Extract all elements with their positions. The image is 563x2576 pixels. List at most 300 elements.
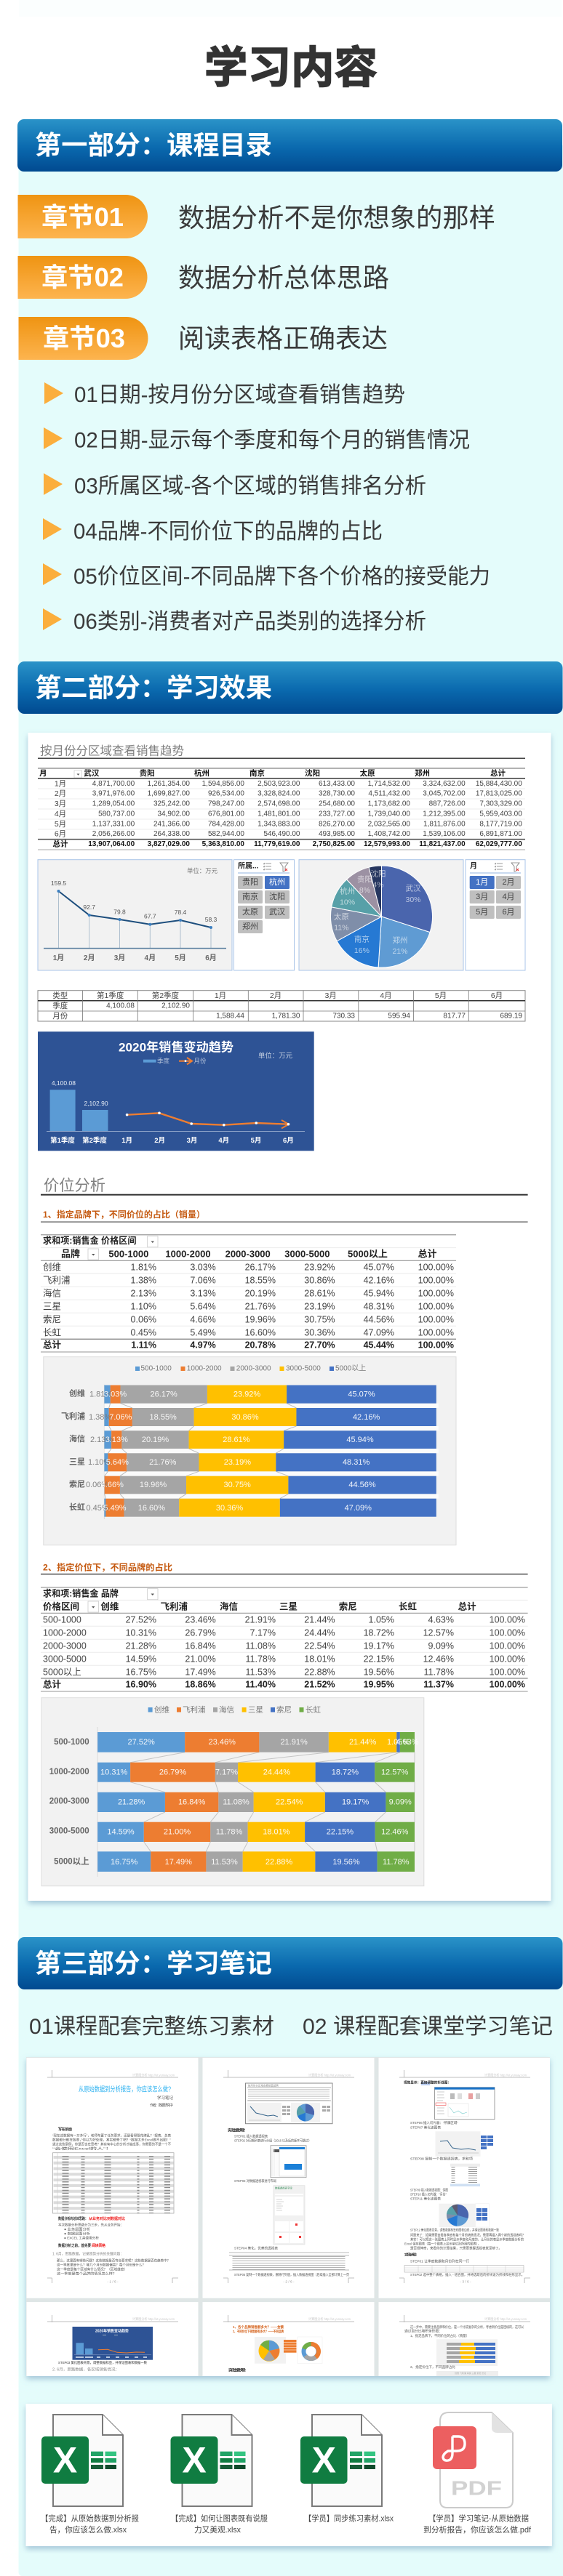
table: quarter and month totals bbox=[38, 991, 525, 1021]
value labels: 7.17% bbox=[215, 1768, 238, 1777]
pivot table: brand by price band: 2.13% bbox=[131, 1288, 156, 1298]
heading: price analysis: 价位分析 bbox=[44, 1178, 105, 1194]
line chart: monthly trend: 92.7 bbox=[83, 903, 95, 911]
value labels: 11.53% bbox=[211, 1858, 238, 1867]
document page 2: 计算图分析 http://ot.yunsay.com bbox=[308, 2073, 351, 2077]
document page 1: 阅读表格 bbox=[92, 2243, 105, 2248]
legend bbox=[148, 1704, 321, 1714]
heading: part one bbox=[17, 119, 562, 172]
value labels: 11.78% bbox=[216, 1827, 242, 1836]
table: monthly regional sales: 3,045,702.00 bbox=[423, 790, 466, 798]
table: monthly regional sales: 8,177,719.00 bbox=[479, 820, 522, 828]
pivot table: price band by brand: 12.57% bbox=[423, 1627, 454, 1638]
table: monthly regional sales: 241,366.00 bbox=[153, 820, 190, 828]
legend: 2000-3000 bbox=[236, 1365, 271, 1372]
pivot table: brand by price band: 0.06% bbox=[131, 1314, 156, 1324]
document page 3: 计算图分析 http://ot.yunsay.com bbox=[484, 2073, 527, 2077]
legend: 长虹 bbox=[306, 1705, 321, 1714]
table: quarter and month totals: 2,102.90 bbox=[161, 1002, 190, 1010]
pivot table: price band by brand: 19.56% bbox=[364, 1667, 394, 1677]
slicer: month: 1月 bbox=[476, 878, 488, 887]
table: monthly regional sales: 1,289,054.00 bbox=[92, 800, 135, 808]
table: monthly regional sales: 17,813,025.00 bbox=[476, 790, 522, 798]
document page 1: 这一季度是每个区域有什么情况？（区域维度） bbox=[57, 2266, 127, 2272]
pivot table: brand by price band: 100.00% bbox=[418, 1340, 454, 1350]
table: monthly regional sales: 798,247.00 bbox=[208, 800, 244, 808]
combo chart: 2020 sales trend: 2,102.90 bbox=[84, 1100, 108, 1107]
combo chart: 2020 sales trend: 2020年销售变动趋势 bbox=[119, 1039, 233, 1054]
table: monthly regional sales: 1,811,876.00 bbox=[423, 820, 466, 828]
document page 2: STEP02 对日期列表进行分组（2016 以及后的版本可跳过） bbox=[234, 2138, 311, 2143]
document page 2: STEP03 对数据透视表进行布局 bbox=[234, 2178, 276, 2183]
label: file 1 bbox=[41, 2513, 139, 2535]
line chart: monthly trend: 159.5 bbox=[51, 880, 66, 887]
pivot table: brand by price band: 3.03% bbox=[190, 1262, 216, 1272]
pivot table: price band by brand: 100.00% bbox=[490, 1627, 525, 1638]
pivot table: price band by brand: 11.53% bbox=[246, 1667, 276, 1677]
pivot table: price band by brand: 求和项:销售金 品牌 bbox=[43, 1587, 119, 1598]
brand labels: 长虹 bbox=[69, 1502, 85, 1512]
pivot table: brand by price band: 2000-3000 bbox=[225, 1249, 271, 1259]
pivot table: price band by brand: 22.15% bbox=[364, 1654, 394, 1664]
document page 1: 数据都分散在各表，”你以为好处理，其实都晕了吧？“数据太多Excel做不出图！” bbox=[52, 2137, 171, 2143]
pivot table: brand by price band: 45.44% bbox=[364, 1340, 394, 1350]
table: monthly regional sales: 1,699,827.00 bbox=[148, 790, 190, 798]
table: monthly regional sales: 4月 bbox=[55, 810, 66, 818]
pivot table: brand by price band: 5.64% bbox=[190, 1301, 216, 1311]
table: quarter and month totals: 1月 bbox=[215, 991, 226, 1000]
pivot table: price band by brand: 9.09% bbox=[428, 1641, 454, 1651]
pivot table: price band by brand: 21.28% bbox=[126, 1641, 156, 1651]
pivot table: price band by brand: 海信 bbox=[220, 1601, 238, 1611]
table: monthly regional sales: 926,534.00 bbox=[208, 790, 244, 798]
value labels: 18.01% bbox=[263, 1827, 290, 1836]
table: monthly regional sales: 34,902.00 bbox=[157, 810, 190, 818]
pivot table: price band by brand: 22.54% bbox=[304, 1641, 335, 1651]
value labels: 16.75% bbox=[111, 1858, 138, 1867]
line chart: monthly trend: 4月 bbox=[145, 954, 156, 962]
pivot table: price band by brand: 100.00% bbox=[490, 1667, 525, 1677]
value labels: 9.09% bbox=[389, 1798, 412, 1807]
legend bbox=[135, 1364, 366, 1372]
value labels: 1.38% bbox=[89, 1413, 111, 1422]
bullet list: 04品牌-不同价位下的品牌的占比 bbox=[73, 520, 383, 544]
pivot table: price band by brand: 总计 bbox=[458, 1601, 476, 1611]
line chart: monthly trend bbox=[38, 860, 232, 970]
table: monthly regional sales: 1,594,856.00 bbox=[202, 780, 244, 788]
slicer: region: 杭州 bbox=[269, 877, 285, 887]
value labels: 3.03% bbox=[104, 1390, 127, 1398]
label: file 2: 力又美观.xlsx bbox=[194, 2525, 241, 2535]
mini dashboard bbox=[246, 2083, 332, 2124]
table: quarter and month totals: 3月 bbox=[325, 991, 337, 1000]
document page 3: STEP06 插入切片器："所属区域" bbox=[410, 2120, 458, 2125]
pie chart: region share: 10% bbox=[340, 898, 355, 907]
value labels: 23.46% bbox=[209, 1738, 236, 1747]
table: monthly regional sales: 11,821,437.00 bbox=[419, 840, 466, 848]
panel: document thumbnails backing bbox=[26, 2057, 550, 2376]
document page 3: STEP09 插入数据透视图：饼图 bbox=[410, 2188, 448, 2192]
label: file 1: 告，你应该怎么做.xlsx bbox=[49, 2524, 127, 2535]
chapter 01: 数据分析不是你想象的那样 bbox=[178, 203, 495, 233]
value labels: 22.54% bbox=[276, 1798, 303, 1807]
value labels: 14.59% bbox=[107, 1827, 135, 1836]
table: quarter and month totals: 4月 bbox=[380, 991, 392, 1000]
table: quarter and month totals: 第1季度 bbox=[97, 991, 124, 1000]
mini stacked bars bbox=[436, 2339, 498, 2366]
value labels: 5.64% bbox=[106, 1458, 129, 1467]
combo chart: 2020 sales trend: 月份 bbox=[193, 1058, 207, 1065]
pivot table: brand by price band: 1.11% bbox=[131, 1340, 156, 1350]
pivot table: price band by brand: 17.49% bbox=[185, 1667, 216, 1677]
table: monthly regional sales: 1,714,532.00 bbox=[368, 780, 410, 788]
table: monthly regional sales: 887,726.00 bbox=[429, 800, 466, 808]
table: quarter and month totals: 5月 bbox=[435, 991, 447, 1000]
slicer: month bbox=[466, 860, 525, 970]
pivot table: price band by brand: 7.17% bbox=[250, 1627, 276, 1638]
mini pivot bbox=[229, 2253, 349, 2271]
combo chart: 2020 sales trend: 5月 bbox=[251, 1137, 261, 1145]
bars bbox=[97, 1732, 415, 1872]
value labels: 5.49% bbox=[103, 1504, 127, 1513]
label: pdf file: 【学员】学习笔记-从原始数据 bbox=[428, 2513, 529, 2524]
value labels: 28.61% bbox=[223, 1436, 250, 1444]
document page 1: 这一季度里是什么？哪几个月份数据偏高？每个月份是什么？ bbox=[57, 2262, 145, 2268]
pivot table: brand by price band: 27.70% bbox=[304, 1340, 335, 1350]
label: pdf file bbox=[423, 2513, 532, 2535]
pivot table: brand by price band: 1000-2000 bbox=[165, 1249, 211, 1259]
bars bbox=[104, 1385, 436, 1517]
slicer: region: 贵阳 bbox=[242, 877, 258, 887]
pivot table: price band by brand: 2000-3000 bbox=[43, 1641, 87, 1651]
document page 3: STEP02 选中整个表格，插入 - 组合图，并将选取后的折线设为折线和柱形显示。 bbox=[410, 2272, 524, 2277]
document page 1: “会使用Excel的人”！ bbox=[52, 2146, 112, 2152]
document page 1: ● 数据层面分析 bbox=[64, 2231, 90, 2236]
table: quarter and month totals: 4,100.08 bbox=[106, 1002, 135, 1010]
mini field pane: 数据透视表字段 bbox=[275, 2186, 292, 2189]
combo chart: 2020 sales trend: 6月 bbox=[283, 1137, 294, 1145]
table: monthly regional sales: 杭州 bbox=[194, 768, 209, 778]
slicer: month: 月 bbox=[470, 862, 477, 871]
panel: chapter list bbox=[17, 195, 495, 360]
pivot table: price band by brand: 19.95% bbox=[364, 1680, 394, 1690]
sheet title: 按月份分区域查看销售趋势 bbox=[40, 744, 184, 757]
pivot table: price band by brand: 11.78% bbox=[246, 1654, 276, 1664]
value labels: 18.55% bbox=[150, 1413, 177, 1422]
heading: part two bbox=[17, 661, 563, 714]
table: monthly regional sales: 11,779,619.00 bbox=[254, 840, 300, 848]
pivot table: price band by brand: 14.59% bbox=[126, 1654, 156, 1664]
table: monthly regional sales: 3,328,824.00 bbox=[257, 790, 300, 798]
top pale strip bbox=[19, 0, 562, 17]
pivot table: brand by price band: 4.97% bbox=[190, 1340, 216, 1350]
pivot table: brand by price band: 20.19% bbox=[245, 1288, 276, 1298]
value labels: 30.36% bbox=[216, 1504, 243, 1513]
pivot table: brand by price band: 总计 bbox=[418, 1249, 437, 1259]
mini blue chart bbox=[73, 2327, 153, 2360]
document page 1: 数据分析之前，首先要 bbox=[58, 2243, 91, 2248]
pivot table: brand by price band: 索尼 bbox=[43, 1314, 61, 1324]
document page 1: 1. 6月，思路数据，记录趋势分析的关键问题： bbox=[52, 2251, 124, 2257]
pivot table: price band by brand bbox=[41, 1587, 528, 1691]
pivot table: price band by brand: 16.84% bbox=[185, 1641, 216, 1651]
document page 2 bbox=[202, 2058, 374, 2298]
table: monthly regional sales: 4,511,432.00 bbox=[368, 790, 410, 798]
line chart: monthly trend: 79.8 bbox=[113, 909, 126, 916]
mini pie bbox=[439, 2204, 489, 2227]
value labels: 42.16% bbox=[353, 1413, 380, 1422]
title: 学习内容 bbox=[204, 44, 378, 92]
table: monthly regional sales: 3,324,632.00 bbox=[423, 780, 466, 788]
table: monthly regional sales: 1,173,682.00 bbox=[368, 800, 410, 808]
table: monthly regional sales: 3,827,029.00 bbox=[148, 840, 190, 848]
stacked bar chart: brands by price band bbox=[41, 1698, 424, 1886]
table: monthly regional sales: 1,481,801.00 bbox=[257, 810, 300, 818]
band labels: 2000-3000 bbox=[49, 1798, 89, 1806]
pivot table: brand by price band: 三星 bbox=[43, 1301, 61, 1311]
icon: excel file 1 bbox=[41, 2415, 123, 2506]
document page 3: STEP07 美化该图表 bbox=[410, 2125, 441, 2130]
document page 3: STEP11 美化该图表 bbox=[410, 2197, 441, 2201]
pivot table: price band by brand: 100.00% bbox=[490, 1614, 525, 1625]
pie chart: region share: 太原 bbox=[334, 912, 349, 922]
value labels: 26.17% bbox=[151, 1390, 177, 1398]
table: monthly regional sales: 6月 bbox=[55, 830, 66, 839]
pivot table: brand by price band: 1.38% bbox=[131, 1275, 156, 1285]
value labels: 21.00% bbox=[164, 1827, 191, 1836]
mini chart dialog bbox=[435, 2088, 495, 2120]
table: quarter and month totals: 1,588.44 bbox=[216, 1012, 244, 1021]
pivot table: price band by brand: 21.00% bbox=[185, 1654, 216, 1664]
bullet list: 05价位区间-不同品牌下各个价格的接受能力 bbox=[73, 565, 490, 589]
brand labels: 飞利浦 bbox=[61, 1411, 85, 1421]
table: monthly regional sales: 1,137,331.00 bbox=[92, 820, 135, 828]
legend: 三星 bbox=[248, 1705, 263, 1714]
combo chart: 2020 sales trend: 单位：万元 bbox=[258, 1051, 292, 1060]
table: monthly regional sales: 2月 bbox=[55, 789, 66, 798]
value labels: 16.60% bbox=[138, 1504, 165, 1513]
table: monthly regional sales: 328,730.00 bbox=[319, 790, 355, 798]
value labels: 7.06% bbox=[109, 1413, 132, 1422]
value labels: 44.56% bbox=[348, 1481, 376, 1489]
pivot table: brand by price band: 总计 bbox=[43, 1339, 62, 1350]
pivot table: price band by brand: 索尼 bbox=[339, 1601, 357, 1611]
value labels: 4.63% bbox=[396, 1738, 419, 1747]
pivot table: brand by price band: 26.17% bbox=[245, 1262, 276, 1272]
document page 1: 那么，这里面有哪些问题？这些数据是否符合要求呢？这些数据是否在趋势中？ bbox=[57, 2258, 170, 2263]
table: monthly regional sales: 1,343,883.00 bbox=[257, 820, 300, 828]
heading: part three: 第三部分：学习笔记 bbox=[35, 1948, 272, 1979]
pivot table: price band by brand: 总计 bbox=[43, 1679, 62, 1690]
slicer: month: 6月 bbox=[502, 908, 515, 917]
pivot table: brand by price band: 20.78% bbox=[245, 1340, 276, 1350]
combo chart: 2020 sales trend: 第2季度 bbox=[82, 1136, 107, 1145]
document page 1: 作者：数据研究中 bbox=[150, 2103, 173, 2108]
document page 1: 这一季度是每个品牌的情况怎么样？ bbox=[57, 2271, 116, 2277]
table: monthly regional sales: 62,029,777.00 bbox=[476, 840, 522, 848]
document page 1 bbox=[26, 2058, 198, 2298]
bullet list: 01日期-按月份分区域查看销售趋势 bbox=[74, 383, 405, 407]
pivot table: price band by brand: 21.91% bbox=[245, 1614, 276, 1625]
value labels: 45.94% bbox=[346, 1436, 374, 1444]
document page 2: STEP05 复制一个数据透视表，删除行列值，插入数据透视图（后续插入全部计算上一页 bbox=[234, 2272, 349, 2277]
slicer: month: 3月 bbox=[476, 893, 488, 901]
value labels: 1.10% bbox=[88, 1458, 111, 1467]
document page 1: 写在前面 bbox=[58, 2127, 72, 2132]
chapter 02 bbox=[17, 256, 389, 299]
document page 5: 实现主要步骤： bbox=[228, 2367, 248, 2372]
value labels: 10.31% bbox=[100, 1768, 128, 1777]
pie chart: region share: 南京 bbox=[354, 935, 370, 944]
value labels: 30.75% bbox=[224, 1481, 251, 1489]
table: monthly regional sales: 12,579,993.00 bbox=[364, 840, 410, 848]
value labels: 19.17% bbox=[342, 1798, 369, 1807]
value labels: 48.31% bbox=[343, 1458, 370, 1467]
stacked bar chart: price bands by brand bbox=[44, 1357, 456, 1545]
legend: 创维 bbox=[154, 1704, 169, 1714]
table: monthly regional sales: 6,891,871.00 bbox=[479, 830, 522, 838]
table: monthly regional sales: 264,338.00 bbox=[153, 830, 190, 838]
raw data mini table bbox=[52, 2153, 174, 2213]
slicer: region: 武汉 bbox=[269, 907, 285, 917]
table: quarter and month totals: 689.19 bbox=[500, 1012, 522, 1021]
document page 1: - 1 / 6 - bbox=[107, 2279, 119, 2284]
band labels: 3000-5000 bbox=[49, 1827, 89, 1836]
slicer: region: 所属... bbox=[238, 862, 259, 871]
value labels: 47.09% bbox=[345, 1504, 372, 1513]
table: monthly regional sales: 武汉 bbox=[84, 768, 100, 778]
table: quarter and month totals: 817.77 bbox=[443, 1012, 466, 1021]
pivot table: brand by price band: 23.19% bbox=[304, 1301, 335, 1311]
table: monthly regional sales bbox=[38, 768, 525, 850]
slicer: region: 沈阳 bbox=[269, 891, 285, 901]
table: monthly regional sales: 太原 bbox=[360, 768, 375, 778]
brand labels: 海信 bbox=[69, 1433, 85, 1444]
pivot table: price band by brand: 18.72% bbox=[364, 1627, 394, 1638]
pie chart: region share: 贵阳 bbox=[357, 874, 372, 884]
pie chart: region share: 21% bbox=[392, 947, 408, 956]
icon: excel file 3: X bbox=[312, 2439, 336, 2480]
table: monthly regional sales: 1,408,742.00 bbox=[368, 830, 410, 838]
table: quarter and month totals: 730.33 bbox=[332, 1012, 355, 1021]
combo chart: 2020 sales trend: 季度 bbox=[157, 1058, 170, 1065]
mini summary table bbox=[404, 2266, 524, 2272]
chapter 01: 章节01 bbox=[41, 202, 124, 232]
table: monthly regional sales: 5,363,810.00 bbox=[202, 840, 244, 848]
slicer: region: 太原 bbox=[242, 907, 258, 917]
pivot table: brand by price band: 500-1000 bbox=[108, 1249, 148, 1259]
value labels: 21.91% bbox=[280, 1738, 308, 1747]
value labels: 19.56% bbox=[332, 1858, 360, 1867]
combo chart: 2020 sales trend: 4月 bbox=[218, 1137, 229, 1145]
document page 1: ● 业务层面分析 bbox=[64, 2227, 90, 2231]
pivot table: price band by brand: 三星 bbox=[279, 1601, 298, 1611]
document page 5: 2、不同价位下销售额有多大？——不同品牌 bbox=[233, 2329, 284, 2334]
brand labels: 三星 bbox=[69, 1457, 85, 1467]
value labels: 11.78% bbox=[383, 1858, 410, 1867]
table: monthly regional sales: 1,212,395.00 bbox=[423, 810, 466, 818]
heading: part one: 第一部分：课程目录 bbox=[35, 130, 272, 160]
mini field pane bbox=[273, 2186, 305, 2245]
pivot table: price band by brand: 11.37% bbox=[423, 1680, 454, 1690]
document page 1: “现在这数据有一万多行”，老师布置了任务要求，还是看得眼花缭乱？“报表、总表 bbox=[52, 2133, 171, 2138]
table: monthly regional sales: 3,971,976.00 bbox=[92, 790, 135, 798]
pivot table: brand by price band: 海信 bbox=[43, 1287, 61, 1298]
pivot table: price band by brand: 19.17% bbox=[364, 1641, 394, 1651]
label: file 1: 【完成】从原始数据到分析报 bbox=[41, 2513, 139, 2524]
pivot table: brand by price band: 48.31% bbox=[364, 1301, 394, 1311]
pivot table: price band by brand: 价格区间 bbox=[43, 1601, 79, 1611]
pivot table: brand by price band: 47.09% bbox=[364, 1327, 394, 1337]
value labels: 20.19% bbox=[142, 1436, 169, 1444]
value labels: 0.45% bbox=[86, 1504, 109, 1513]
panel: results sheet bbox=[28, 733, 551, 1901]
mini total table bbox=[450, 2164, 480, 2186]
table: monthly regional sales: 1月 bbox=[55, 779, 66, 788]
pivot table: brand by price band: 100.00% bbox=[418, 1275, 454, 1285]
table: monthly regional sales: 233,727.00 bbox=[319, 810, 355, 818]
pivot table: brand by price band: 42.16% bbox=[364, 1275, 394, 1285]
pivot table: price band by brand: 26.79% bbox=[185, 1627, 216, 1638]
document page 1: 数据分析的总体思路： bbox=[58, 2216, 88, 2221]
document page 3: 问题来了：如果需要查看各季度和每个月的销售情况，需要再插入两个新的透视表吗？ bbox=[410, 2233, 525, 2237]
icon: excel file 3 bbox=[300, 2415, 382, 2506]
label: file 3: 【学员】同步练习素材.xlsx bbox=[304, 2513, 394, 2524]
bullet list: 02日期-显示每个季度和每个月的销售情况 bbox=[74, 429, 470, 452]
document page 3: 实现步骤： bbox=[404, 2252, 419, 2258]
value labels: 1.05% bbox=[387, 1738, 410, 1747]
line chart: monthly trend: 单位：万元 bbox=[187, 867, 217, 874]
value labels: 26.79% bbox=[159, 1768, 186, 1777]
line chart: monthly trend: 78.4 bbox=[175, 909, 187, 916]
pivot table: price band by brand: 11.40% bbox=[245, 1680, 276, 1690]
chapter 02: 章节02 bbox=[41, 262, 124, 292]
pivot table: brand by price band: 30.36% bbox=[304, 1327, 335, 1337]
document page 2: 实现主要步骤： bbox=[228, 2128, 247, 2133]
pivot table: price band by brand: 12.46% bbox=[423, 1654, 454, 1664]
pie chart: region share: 30% bbox=[405, 895, 421, 904]
pivot table: brand by price band: 长虹 bbox=[43, 1327, 62, 1337]
table: monthly regional sales: 5,959,403.00 bbox=[479, 810, 522, 818]
table: monthly regional sales: 13,907,064.00 bbox=[88, 840, 135, 848]
subheading 1: 1、指定品牌下，不同价位的占比（销量） bbox=[43, 1209, 205, 1220]
document page 6: 创维 飞利浦 海信 三星 索尼 长虹 bbox=[455, 2371, 486, 2375]
slicer: region: 南京 bbox=[242, 891, 258, 901]
table: monthly regional sales: 1,261,354.00 bbox=[148, 780, 190, 788]
value labels: 11.08% bbox=[223, 1798, 249, 1807]
table: monthly regional sales: 1,539,106.00 bbox=[423, 830, 466, 838]
table: monthly regional sales: 580,737.00 bbox=[98, 810, 135, 818]
table: quarter and month totals: 2月 bbox=[270, 991, 282, 1000]
document page 4 bbox=[26, 2302, 198, 2376]
document page 2: STEP04 美化，优美的透视表 bbox=[234, 2246, 278, 2250]
table: quarter and month totals: 595.94 bbox=[388, 1012, 410, 1021]
subheading 2: 2、指定价位下，不同品牌的占比 bbox=[43, 1561, 172, 1572]
value labels: 45.07% bbox=[348, 1390, 375, 1398]
table: monthly regional sales: 2,503,923.00 bbox=[257, 780, 300, 788]
pivot table: brand by price band: 18.55% bbox=[245, 1275, 276, 1285]
table: monthly regional sales: 2,750,825.00 bbox=[313, 840, 355, 848]
pivot table: brand by price band: 4.66% bbox=[190, 1314, 216, 1324]
document page 6: 计算图分析 http://ot.yunsay.com bbox=[484, 2317, 527, 2322]
icon: excel file 2 bbox=[170, 2415, 252, 2506]
brand labels: 索尼 bbox=[69, 1478, 85, 1489]
pivot table: brand by price band: 5000以上 bbox=[348, 1249, 388, 1259]
document page 1: 从原始数据到分析报告，你应该怎么做? bbox=[79, 2085, 171, 2093]
pivot table: price band by brand: 3000-5000 bbox=[43, 1654, 87, 1664]
value labels bbox=[100, 1738, 419, 1867]
pivot table: price band by brand: 5000以上 bbox=[43, 1667, 81, 1677]
